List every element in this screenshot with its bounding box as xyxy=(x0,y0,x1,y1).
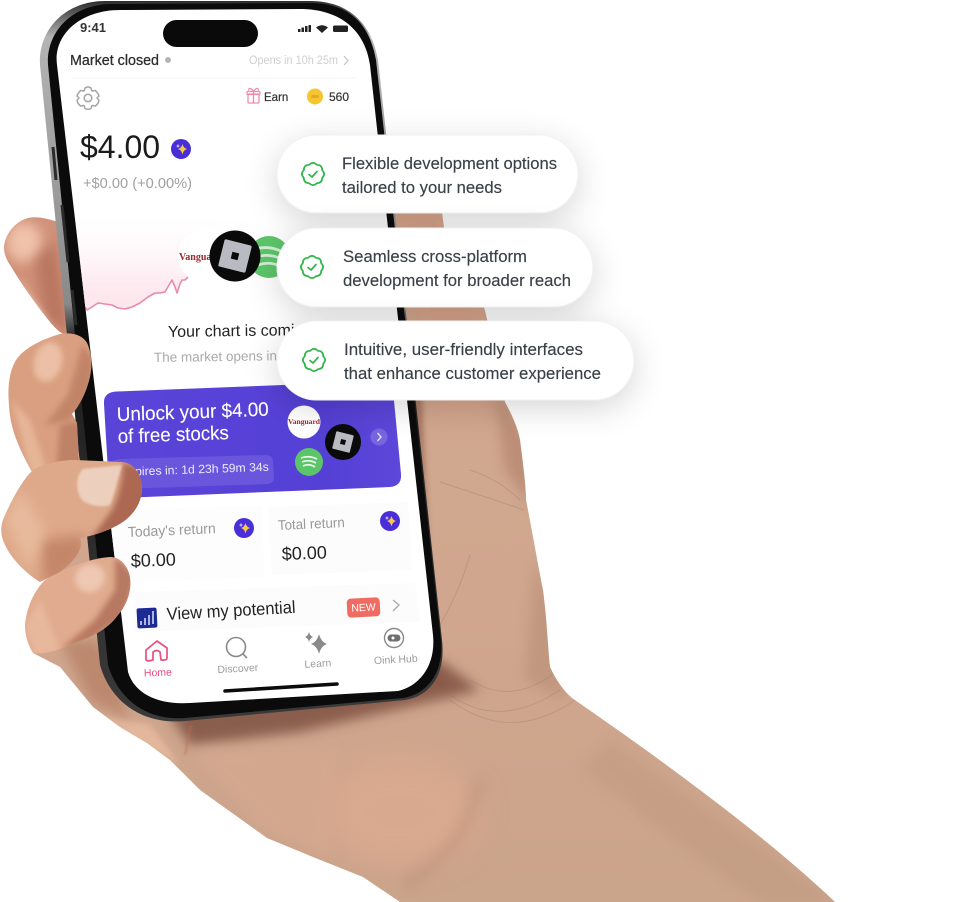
icon: green check badge xyxy=(301,256,323,278)
palm and forearm xyxy=(33,195,835,902)
chevron button xyxy=(370,428,388,446)
icon: green check badge xyxy=(302,163,324,185)
tab: home xyxy=(144,641,172,679)
market opens note: Opens in 10h 25m xyxy=(249,55,338,67)
label: Today's return xyxy=(127,521,216,541)
phone black bezel xyxy=(48,3,441,718)
row: view my potential xyxy=(135,583,420,632)
label: Oink Hub xyxy=(374,653,418,667)
new badge: NEW xyxy=(351,601,376,615)
header divider xyxy=(72,78,355,79)
logo: vanguard xyxy=(178,253,220,278)
card background xyxy=(268,502,412,575)
sparkle badge xyxy=(234,518,254,538)
text xyxy=(343,248,571,290)
phone outer frame xyxy=(40,1,443,721)
pill xyxy=(277,321,634,400)
feature card: flexible development xyxy=(277,135,578,213)
expiry pill xyxy=(112,455,274,489)
card background xyxy=(111,528,115,558)
tab: oink hub xyxy=(374,628,418,667)
banner heading: Unlock your $4.00 xyxy=(116,399,269,426)
icon: coin xyxy=(307,88,323,104)
logo: roblox small xyxy=(325,424,361,460)
icon: search xyxy=(226,638,247,658)
palm shading xyxy=(6,10,575,862)
text: tailored to your needs xyxy=(342,179,502,197)
chevron xyxy=(393,600,399,611)
banner heading xyxy=(118,402,268,444)
dynamic island xyxy=(163,20,258,47)
card: today's return xyxy=(111,518,254,568)
logo: spotify xyxy=(254,236,285,278)
label: Home xyxy=(144,667,172,679)
market status dot xyxy=(165,57,171,63)
icon: bars xyxy=(136,607,158,629)
chevron xyxy=(344,56,348,65)
index finger behind phone xyxy=(4,217,67,334)
icon: sparkles xyxy=(305,632,327,654)
fingernail xyxy=(77,465,122,506)
banner heading: of free stocks xyxy=(117,422,229,448)
chart coming heading: Your chart is coming soon xyxy=(168,321,352,341)
coin balance: 560 xyxy=(329,90,349,104)
logo: vanguard small: Vanguard xyxy=(288,418,320,426)
label: Learn xyxy=(304,657,332,671)
expiry text: Expires in: 1d 23h 59m 34s xyxy=(121,460,269,479)
chart line xyxy=(82,276,189,310)
market opens subtext: The market opens in 10h 25m xyxy=(154,347,333,365)
logo: vanguard: Vanguard xyxy=(179,252,222,263)
banner background xyxy=(104,381,401,498)
phone xyxy=(40,1,443,721)
text: Seamless cross-platform xyxy=(343,248,527,266)
hand: palm and forearm behind phone xyxy=(0,195,835,902)
text: Flexible development options xyxy=(342,155,557,173)
tab: discover xyxy=(217,638,259,676)
text xyxy=(342,155,557,197)
logo: roblox xyxy=(210,230,260,282)
market closed label: Market closed xyxy=(70,53,159,69)
text: that enhance customer experience xyxy=(344,365,601,383)
home indicator xyxy=(225,684,337,691)
sparkle badge xyxy=(380,511,400,531)
phone screen xyxy=(57,9,433,703)
banner: free stocks xyxy=(104,381,401,498)
pill xyxy=(277,135,578,213)
sparkle badge xyxy=(171,139,191,159)
feature card: intuitive interfaces xyxy=(277,321,634,400)
middle finger xyxy=(0,455,150,590)
text xyxy=(344,341,601,383)
tab: learn xyxy=(304,632,332,671)
label: Discover xyxy=(217,662,259,676)
lower finger xyxy=(20,550,140,660)
logo: vanguard small xyxy=(288,406,320,438)
value: $0.00 xyxy=(130,549,176,571)
icon: gift xyxy=(247,88,260,103)
row background xyxy=(135,583,420,632)
label: Total return xyxy=(277,514,345,533)
text: development for broader reach xyxy=(343,272,571,290)
row label: View my potential xyxy=(166,597,296,624)
portfolio change: +$0.00 (+0.00%) xyxy=(83,176,192,192)
ring finger xyxy=(0,325,100,485)
earn label: Earn xyxy=(264,92,288,104)
status bar time: 9:41 xyxy=(80,20,106,35)
icon: home xyxy=(146,641,167,661)
feature card: cross-platform xyxy=(277,228,593,307)
icon: settings gear xyxy=(77,87,99,109)
chart area xyxy=(74,216,187,309)
value: $0.00 xyxy=(281,542,327,564)
new badge xyxy=(347,597,381,618)
screen content xyxy=(70,20,420,691)
side buttons xyxy=(53,147,76,325)
card: total return xyxy=(268,502,412,575)
icon: oink xyxy=(384,628,404,648)
icon: green check badge xyxy=(303,349,325,371)
pill xyxy=(277,228,593,307)
portfolio value: $4.00 xyxy=(80,129,160,165)
fingers gripping the phone xyxy=(0,325,150,660)
text: Intuitive, user-friendly interfaces xyxy=(344,341,583,359)
logo: spotify small xyxy=(295,448,323,476)
status icons xyxy=(298,25,348,33)
